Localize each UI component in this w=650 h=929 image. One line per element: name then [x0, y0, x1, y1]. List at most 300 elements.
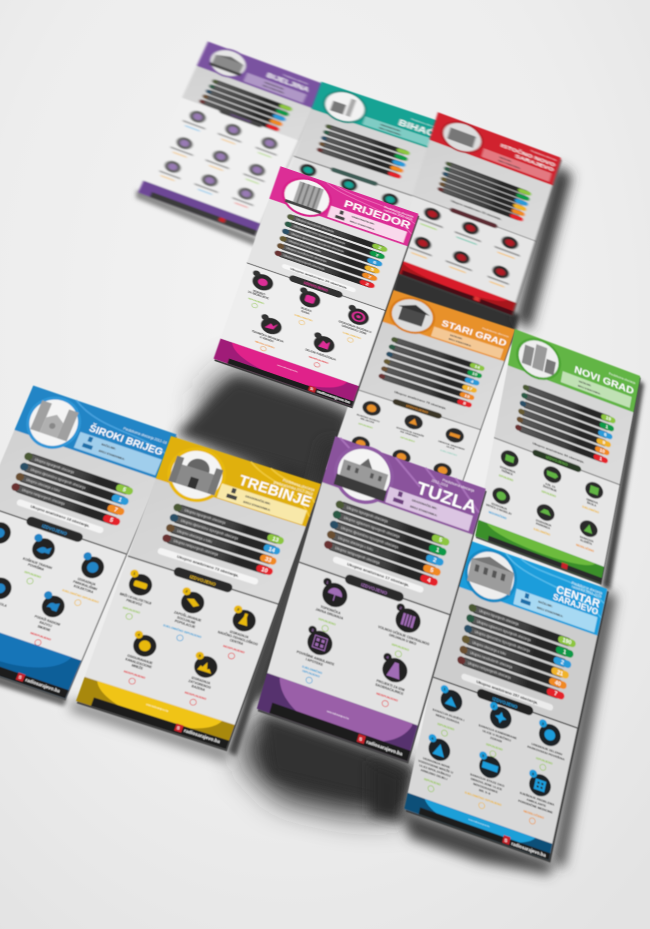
- total: Ukupno analizirano 257 obećanja.: [476, 679, 539, 705]
- items: 4: [137, 632, 141, 637]
- items: 6: [532, 771, 536, 777]
- header: Predizborna obećanja: [530, 150, 558, 162]
- header: [377, 288, 515, 363]
- bars: Ukupno uglavnom ispunjenih obećanja: [343, 516, 400, 539]
- izdvojeno pill: IZDVOJENO: [406, 404, 429, 414]
- bars: 19: [464, 393, 471, 399]
- header: načelnika 2012–2016: [571, 585, 602, 599]
- total: [332, 556, 424, 593]
- bars: 7: [368, 274, 372, 280]
- bars: 2: [378, 245, 382, 250]
- card: Široki Brijeg: [0, 386, 178, 701]
- items: ULICE U RIJEČNOJ: [482, 728, 512, 743]
- items: PARKINGA: [536, 521, 551, 530]
- bars: Ukupno ispunjenih obećanja: [346, 506, 388, 524]
- bars: 5: [122, 487, 127, 493]
- header: Predizborna obećanja: [482, 326, 510, 338]
- items: ISPUNJENO: [391, 642, 410, 652]
- bars: 40: [554, 680, 561, 688]
- footer: [214, 338, 359, 406]
- header: PRIJEDOR: [342, 198, 412, 232]
- items: NEKIH ZGRADA: [435, 713, 460, 725]
- bars: 10: [599, 447, 606, 454]
- items: ULICI SPOLJAŠNJOJ: [419, 762, 451, 778]
- bars: 14: [474, 364, 481, 370]
- bars: 2: [560, 660, 564, 667]
- items: NEISPUNJENO: [123, 669, 146, 680]
- items: ŽIVOTINJE: [543, 483, 557, 493]
- items: [406, 204, 524, 290]
- bars: Ukupno obećanja u toku: [26, 478, 61, 493]
- items: AZIL ZA: [545, 482, 556, 489]
- header: NOVI GRAD: [573, 365, 635, 397]
- items: 1: [443, 686, 447, 692]
- bars: Ukupno obećanja u toku: [472, 640, 507, 656]
- items: PODRŽI RADIONI: [34, 614, 61, 627]
- header: načelnika 2012–2016: [383, 208, 413, 222]
- card: Bihać: [262, 82, 443, 282]
- total: Ukupno analizirano 64 obećanja.: [532, 441, 585, 464]
- bars: 5: [370, 267, 375, 272]
- bars: 1: [599, 456, 603, 462]
- card: Centar Sarajevo: [404, 538, 609, 863]
- items: POVRŠINA: [27, 562, 46, 572]
- items: IZGRADNJA BAZENA U: [338, 320, 372, 334]
- items: [230, 269, 378, 382]
- bars: 4: [426, 578, 432, 585]
- items: NEDOREČENO: [488, 511, 507, 520]
- bars: Ukupno neispunjenih obećanja: [335, 546, 380, 565]
- bars: [316, 124, 411, 179]
- bars: 2: [432, 558, 437, 564]
- bars: Ukupno djelomično ispunjenih obećanja: [474, 630, 530, 653]
- izdvojeno pill: [493, 434, 620, 488]
- items: ISPUNJENO: [24, 570, 42, 579]
- footer: radiosarajevo.ba: [511, 841, 547, 858]
- footer: [0, 612, 81, 699]
- footer: S: [504, 837, 508, 843]
- items: 4: [431, 735, 435, 741]
- izdvojeno pill: [246, 260, 386, 313]
- bars: Ukupno neispunjenih obećanja: [283, 254, 325, 271]
- bars: [198, 78, 293, 133]
- header: GRADONAČELNIK:: [411, 497, 438, 511]
- items: [290, 575, 438, 718]
- bars: 6: [604, 432, 607, 438]
- items: BAZENA: [191, 684, 206, 692]
- header: NAČELNIK:: [578, 380, 592, 387]
- header: Predizborna obećanja: [411, 118, 438, 129]
- bars: 10: [471, 371, 479, 377]
- items: 3: [541, 721, 545, 726]
- items: IZGRADNJA: [191, 676, 211, 686]
- izdvojeno pill: [0, 500, 128, 558]
- header: BROJ STANOVNIKA:: [578, 384, 601, 396]
- bars: 4: [470, 379, 475, 384]
- items: DJELOMIČNO: [533, 528, 551, 537]
- bars: Ukupno ispunjenih obećanja: [184, 508, 226, 525]
- shadows: [0, 165, 644, 875]
- header: [12, 386, 177, 484]
- bars: [437, 161, 532, 222]
- items: ISPUNJENO: [400, 437, 415, 443]
- items: [0, 518, 117, 659]
- items: 5: [198, 653, 202, 659]
- bars: [323, 499, 450, 587]
- items: NEISPUNJENO: [222, 644, 246, 655]
- items: ISPUNJENO: [302, 669, 321, 679]
- header: [152, 436, 321, 536]
- bars: 8: [463, 401, 467, 406]
- items: ISPUNJENO: [541, 490, 556, 498]
- items: UGRADNJA NOVE: [423, 756, 450, 770]
- items: 2: [492, 703, 496, 709]
- items: AMBULANTE: [526, 798, 546, 808]
- header: ISTOČNO NOVO: [500, 141, 556, 168]
- items: [484, 446, 606, 553]
- items: RAZVOJ: [39, 621, 53, 629]
- bars: [161, 503, 285, 576]
- bars: [457, 603, 576, 700]
- bars: Ukupno obećanja u toku: [338, 536, 374, 552]
- items: NEODLUČENO: [255, 339, 275, 349]
- items: NOVOGRADSKE: [473, 782, 498, 794]
- footer: [138, 181, 261, 235]
- header: TUZLA: [415, 477, 479, 517]
- items: NEISPUNJENO: [30, 631, 52, 642]
- header: TREBINJE: [236, 473, 313, 511]
- items: 2: [399, 605, 403, 610]
- items: OSIGURAVANJE: [127, 654, 154, 666]
- header: [268, 166, 418, 250]
- items: OBNOVA: [586, 497, 598, 505]
- bars: 190: [562, 638, 572, 647]
- footer: S: [358, 736, 363, 742]
- header: Predizborna obećanja: [609, 372, 636, 385]
- bars: 1: [562, 649, 567, 656]
- header: GRADONAČELNIK:: [351, 216, 375, 226]
- header: BIJELJINA: [265, 71, 311, 94]
- items: DJELOMIČNO: [294, 312, 314, 322]
- bars: Ukupno neodlučenih obećanja: [470, 651, 513, 669]
- footer: radiosarajevo.ba: [25, 677, 61, 694]
- items: NEISPUNJENO: [184, 690, 207, 701]
- bars: 5: [438, 538, 443, 544]
- bars: Ukupno obećanja u toku: [177, 529, 213, 544]
- items: ISPUNJENO: [358, 423, 373, 430]
- items: GRADSKOJ ZONI: [341, 324, 367, 336]
- header: BROJ STANOVNIKA:: [243, 500, 271, 512]
- izdvojeno pill: IZDVOJENO: [189, 574, 217, 587]
- bars: 7: [553, 691, 558, 698]
- items: TRŽNICE: [501, 467, 514, 476]
- items: SAOBRAĆAJNICE: [375, 682, 405, 696]
- items: SMJENE: [37, 624, 52, 632]
- total: Ukupno analizirano 18 obećanja.: [30, 504, 91, 528]
- items: SANACIJA KLIZIŠTA I: [432, 707, 465, 723]
- header: gradonačelnika 2012–2016: [273, 480, 314, 496]
- items: 5: [482, 753, 486, 759]
- items: ISPUNJENO: [536, 756, 554, 766]
- items: PORODIČNE MEDICINE: [518, 798, 553, 815]
- bars: Ukupno neodlučenih obećanja: [286, 246, 327, 263]
- footer: S: [310, 387, 314, 392]
- bars: 1: [117, 497, 123, 504]
- items: NEISPUNJENO: [376, 691, 399, 703]
- items: ZAPOŠLJAVANJE: [173, 609, 203, 623]
- bars: 6: [373, 260, 377, 265]
- header: SARAJEVO: [514, 154, 554, 173]
- items: IZGRADNJA: [500, 465, 516, 474]
- bars: 9: [602, 440, 606, 446]
- bars: Ukupno neispunjenih obećanja: [173, 539, 219, 557]
- items: OBNOVA GRADSKIH: [438, 440, 465, 451]
- items: U GRADU: [259, 335, 274, 343]
- header: NAČELNIK:: [499, 156, 512, 163]
- izdvojeno pill: IZDVOJENO: [546, 455, 568, 467]
- bars: 33: [264, 557, 272, 564]
- bars: 1: [605, 424, 609, 430]
- footer: radiosarajevo.ba: [366, 740, 403, 757]
- bars: 1: [435, 548, 440, 554]
- items: SANACIJA KANDIDIRANE: [478, 723, 517, 741]
- header: STARI GRAD: [440, 319, 508, 349]
- items: RIJEKA: [300, 306, 312, 313]
- items: GRIJANJA U BKO: [388, 633, 417, 646]
- items: MILJACKE: [360, 417, 375, 424]
- header: Predizborna obećanja: [283, 74, 309, 85]
- izdvojeno pill: [412, 193, 536, 243]
- card: Bijeljina: [138, 42, 326, 237]
- items: DJELOMIČNO ISPUNJENO: [62, 587, 101, 604]
- izdvojeno pill: IZDVOJENO: [360, 582, 388, 596]
- card: Stari Grad: [326, 288, 516, 512]
- items: ISPUNJENO: [486, 742, 504, 752]
- items: ARMIJSKI ODJELI: [420, 768, 448, 781]
- header: CENTAR: [555, 584, 601, 610]
- items: KOŠENJE TRAVNIH: [22, 556, 54, 570]
- card: Prijedor: [213, 166, 420, 408]
- izdvojeno pill: [219, 109, 263, 128]
- items: ISPUNJENO: [318, 617, 337, 627]
- items: PRIJEVOZ: [126, 598, 143, 607]
- items: DJELOMIČNO: [302, 663, 324, 675]
- items: 3: [236, 607, 241, 612]
- bars: 2: [365, 282, 370, 287]
- header: NAČELNIK:: [538, 599, 553, 609]
- items: NEISPUNJENO: [308, 355, 329, 365]
- header: Predizborna obećanja: [384, 205, 414, 218]
- bars: Ukupno neispunjenih obećanja: [21, 488, 65, 506]
- header: Predizborna obećanja 2012–16: [123, 427, 167, 445]
- footer: www.radiosarajevo.ba: [326, 710, 350, 721]
- items: DJELOMIČNO ISPUNJENO: [163, 623, 203, 639]
- bars: 21: [556, 670, 564, 678]
- bars: 13: [271, 536, 279, 544]
- bars: Ukupno neispunjenih obećanja: [467, 661, 511, 680]
- items: KANALIZACIONE: [125, 657, 153, 670]
- footer: www.radiosarajevo.ba: [277, 365, 299, 374]
- items: ŠKOLA: [587, 500, 597, 508]
- card: Novi Grad: [475, 329, 641, 585]
- card: Trebinje: [75, 436, 322, 751]
- items: SOCIJALNE: [177, 615, 197, 625]
- footer: radiosarajevo.ba: [316, 390, 351, 405]
- header: 2012–2016: [431, 479, 449, 488]
- items: KOLEKTORA: [73, 584, 95, 595]
- items: 1: [133, 571, 137, 576]
- items: DJELOMIČNO: [582, 505, 599, 514]
- items: NEODLUČENO: [523, 808, 545, 820]
- bars: 10: [260, 567, 268, 575]
- items: IZGRADNJA: [229, 630, 250, 640]
- items: PARKOVSKIH POVRŠINA: [527, 744, 566, 762]
- header: Predizborna obećanja: [571, 581, 603, 595]
- items: VODOVODNE MREŽE U: [418, 758, 454, 775]
- items: 3: [311, 627, 315, 633]
- items: JAVNA GRIJANJA: [315, 607, 344, 621]
- items: POVRŠINE AMBULANTE: [296, 649, 336, 667]
- total: Ukupno analizirano 73 obećanja.: [176, 554, 240, 578]
- header: [429, 112, 561, 185]
- items: IZGRADNJA: [491, 502, 508, 511]
- footer: [257, 673, 418, 761]
- items: IZGRADNJA: [77, 577, 97, 587]
- footer: S: [18, 674, 22, 680]
- izdvojeno pill: IZDVOJENO: [303, 281, 328, 293]
- items: [295, 161, 403, 212]
- izdvojeno pill: IZDVOJENO: [230, 113, 252, 124]
- card: Tuzla: [256, 436, 487, 764]
- total: Ukupno analizirano 76 obećanja.: [394, 390, 447, 410]
- items: NAUČNO-TEHNOLOŠKOG: [217, 629, 259, 647]
- header: BROJ STANOVNIKA:: [448, 338, 472, 348]
- bars: Ukupno obećanja u toku: [288, 239, 322, 253]
- items: POPULACIJE: [174, 619, 197, 629]
- total: [281, 263, 356, 293]
- items: IZGRADNJA GARAŽE: [396, 426, 425, 438]
- bars: 5: [109, 518, 114, 524]
- bars: [515, 384, 616, 464]
- items: [346, 398, 471, 481]
- items: DJELOMIČNO: [440, 449, 458, 457]
- items: ZGRADI: [490, 736, 502, 744]
- items: NEODLUČENO: [576, 544, 594, 553]
- izdvojeno pill: IZDVOJENO: [41, 523, 68, 537]
- items: SANA: [301, 309, 310, 315]
- bars: Ukupno ispunjenih obećanja: [296, 217, 335, 233]
- items: UREĐENJE ZELENIH: [531, 742, 563, 757]
- header: [452, 538, 607, 638]
- items: TOPIONIČKA: [320, 604, 342, 616]
- footer: [475, 520, 604, 583]
- items: ISPUNJENO: [499, 474, 514, 482]
- footer: www.radiosarajevo.ba: [146, 703, 169, 713]
- total: Ukupno analizirano 17 obećanja.: [347, 561, 410, 588]
- bars: Ukupno djelomično ispunjenih obećanja: [30, 468, 86, 490]
- header: BROJ STANOVNIKA:: [262, 84, 285, 94]
- bars: Ukupno uglavnom ispunjenih obećanja: [293, 224, 346, 245]
- footer: [76, 677, 235, 749]
- items: I APOTEKE: [305, 657, 324, 667]
- total: [16, 499, 104, 534]
- header: [197, 42, 325, 109]
- header: GRADONAČELNIK:: [380, 124, 401, 133]
- items: [91, 568, 270, 718]
- header: BIHAĆ: [397, 117, 437, 139]
- items: 4: [386, 654, 390, 660]
- card: Istočno Novo Sarajevo: [388, 112, 562, 317]
- footer: S: [176, 725, 181, 731]
- items: BR. 5–9: [479, 788, 491, 796]
- total: [157, 547, 259, 585]
- header: NAČELNIK:: [449, 334, 463, 341]
- items: DJELOMIČNO: [342, 330, 362, 340]
- footer: [389, 257, 516, 315]
- items: ULICA: [446, 445, 455, 451]
- items: BRŽI I KVALITETNIJI: [119, 591, 152, 606]
- header: BROJ STANOVNIKA:: [98, 449, 126, 462]
- bars: Ukupno uglavnom ispunjenih obećanja: [477, 619, 531, 642]
- bars: [274, 213, 388, 289]
- items: VRTIĆA U NASELJU: [486, 502, 512, 516]
- items: CENTRA: [229, 638, 244, 646]
- bars: [10, 451, 134, 526]
- total: [461, 673, 554, 711]
- bars: 5: [429, 568, 434, 574]
- bars: 14: [268, 547, 276, 554]
- items: PARKIRALIŠNIH: [72, 579, 99, 592]
- header: Predizborna obećanja: [282, 478, 315, 492]
- items: ZA BICIKLISTE: [247, 290, 269, 301]
- bars: Ukupno djelomično ispunjenih obećanja: [291, 232, 345, 253]
- items: ZATVORENOG: [188, 679, 212, 690]
- total: Ukupno analizirano 22 obećanja.: [450, 199, 502, 221]
- items: RJEŠENJE PROBLEMA: [519, 790, 556, 807]
- bars: Ukupno djelomično ispunjenih obećanja: [340, 526, 399, 550]
- bars: Ukupno ispunjenih obećanja: [479, 609, 519, 627]
- izdvojeno pill: [126, 551, 280, 608]
- bars: 7: [113, 507, 118, 514]
- items: OBNOVLJENE ULICE: [470, 777, 502, 792]
- items: TEHNIČKA BRANJEVA: [251, 329, 284, 343]
- bars: 19: [605, 416, 612, 422]
- header: [320, 436, 486, 540]
- header: [508, 329, 640, 414]
- items: [413, 681, 572, 834]
- items: 1: [326, 579, 330, 585]
- bars: 7: [375, 253, 380, 258]
- izdvojeno pill: [293, 154, 415, 199]
- items: KLIZIŠTA: [580, 537, 593, 546]
- footer: [404, 793, 552, 860]
- items: SANACIJA STAZE OKO: [470, 772, 505, 789]
- header: SARAJEVO: [552, 592, 599, 617]
- items: VOLNOG UČENJE CENTRALNOG: [378, 624, 430, 647]
- bars: Ukupno ispunjenih obećanja: [34, 457, 75, 474]
- izdvojeno pill: [432, 672, 578, 732]
- items: ISPUNJENO: [248, 296, 265, 305]
- items: [157, 107, 283, 210]
- header: BROJ STANOVNIKA:: [349, 220, 375, 231]
- items: ISPUNJENO: [122, 605, 141, 615]
- items: 2: [185, 589, 189, 594]
- header: BROJ STANOVNIKA:: [498, 160, 521, 170]
- items: PROJEKTI ZA IZNI: [376, 679, 405, 692]
- items: MREŽE: [131, 663, 145, 671]
- header: [311, 82, 442, 151]
- items: IZGRADNJA: [536, 518, 552, 528]
